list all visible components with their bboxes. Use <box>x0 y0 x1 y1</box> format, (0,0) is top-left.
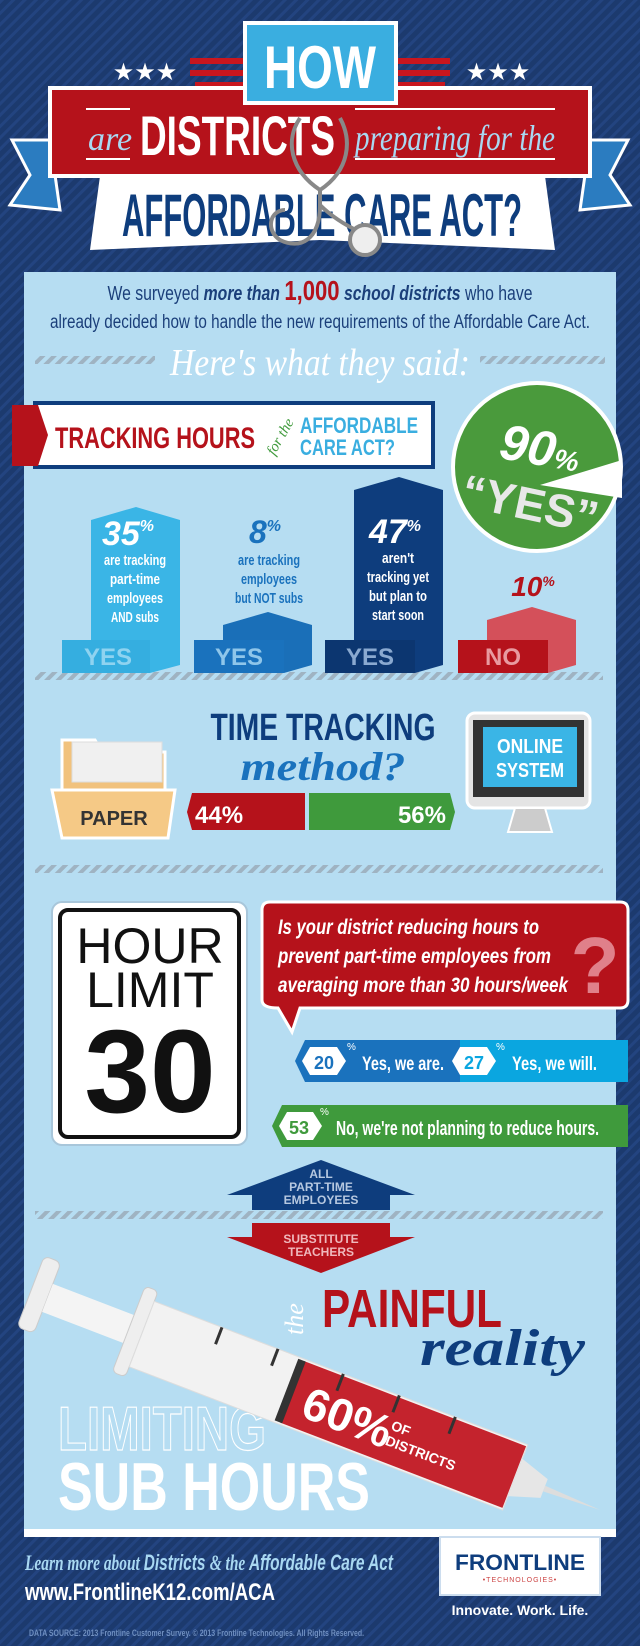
bar: 8% yes: employees <box>241 571 297 588</box>
text: limiting sub hours <box>58 1395 370 1525</box>
bar: 10% no: % <box>542 573 555 589</box>
bar: paper vs online <box>187 793 455 830</box>
footer: learn more: DATA SOURCE: 2013 Frontline Customer Survey. © 2013 Frontline Technologies. All Rights Reserved. <box>29 1628 364 1638</box>
bar: 35% yes: YES <box>84 644 132 671</box>
icon: online system monitor: ONLINE <box>497 736 563 758</box>
icon: paper folder <box>52 740 175 838</box>
bar: paper vs online: 44% <box>195 802 243 829</box>
bar: 8% yes: 8 <box>249 514 267 550</box>
icon: stars left: ★★★ <box>113 59 177 86</box>
bar chart <box>35 477 603 680</box>
bar: 35% yes: are tracking <box>104 552 166 569</box>
callout: reducing hours question <box>262 902 628 1032</box>
answers: yes we are / yes we will <box>295 1040 628 1082</box>
bar: 8% yes: YES <box>215 644 263 671</box>
icon: stethoscope <box>271 118 360 244</box>
heading: the painful reality: PAINFUL <box>322 1279 502 1339</box>
arrow: up all part-time employees: ALL <box>309 1167 333 1181</box>
icon: online system monitor <box>467 713 590 832</box>
icon: syringe 60% of districts: DISTRICTS <box>383 1432 458 1474</box>
arrow: down substitute teachers: SUBSTITUTE <box>283 1232 359 1246</box>
intro text <box>50 275 590 333</box>
icon: syringe 60% of districts: OF <box>389 1417 413 1439</box>
answers: yes we are / yes we will: 20 <box>314 1053 334 1073</box>
footer: learn more <box>24 1550 394 1638</box>
90% yes circle: 90% <box>496 413 585 483</box>
arrow: down substitute teachers <box>227 1223 415 1273</box>
light panel <box>24 272 616 1537</box>
answer: no: 53 <box>289 1118 309 1138</box>
subheading: here's what they said: Here's what they said: <box>169 342 470 384</box>
tracking hours banner: CARE ACT? <box>300 435 395 460</box>
icon: paper folder: PAPER <box>80 808 148 830</box>
answer: no: % <box>320 1107 329 1118</box>
callout: reducing hours question: Is your district reducing hours to <box>278 916 539 939</box>
bar: 8% yes: % <box>267 518 281 535</box>
tracking hours banner: for the <box>264 416 298 458</box>
tracking hours banner: TRACKING HOURS <box>55 422 255 455</box>
bar: 35% yes <box>62 507 180 673</box>
title: DISTRICTS <box>140 104 335 167</box>
tracking hours banner <box>12 403 433 467</box>
arrow: up all part-time employees: EMPLOYEES <box>284 1193 358 1207</box>
tracking hours banner: AFFORDABLE <box>300 413 418 438</box>
90% yes circle <box>453 383 622 551</box>
callout: reducing hours question: prevent part-time employees from <box>277 945 551 968</box>
title: are <box>88 121 132 158</box>
icon: stars right: ★★★ <box>466 59 530 86</box>
time tracking heading: TIME TRACKING <box>210 707 436 749</box>
logo: frontline: FRONTLINE <box>455 1550 585 1575</box>
logo: frontline: Innovate. Work. Life. <box>452 1602 588 1618</box>
answers: yes we are / yes we will: 27 <box>464 1053 484 1073</box>
arrow: down substitute teachers: TEACHERS <box>288 1245 354 1259</box>
text: limiting sub hours: SUB HOURS <box>58 1449 370 1525</box>
icon: online system monitor: SYSTEM <box>496 760 564 782</box>
heading: the painful reality <box>280 1279 586 1377</box>
callout: reducing hours question: averaging more than 30 hours/week <box>278 974 569 997</box>
hour limit sign: 30 <box>84 1006 216 1138</box>
bar: 8% yes: but NOT subs <box>235 590 303 607</box>
bar: 47% yes: start soon <box>372 607 424 624</box>
bar: 35% yes: AND subs <box>111 609 159 626</box>
heading: the painful reality: the <box>280 1303 309 1335</box>
bar: 47% yes <box>325 477 443 673</box>
title <box>10 23 630 255</box>
answers: yes we are / yes we will: % <box>496 1042 505 1053</box>
answers: yes we are / yes we will: Yes, we are. <box>362 1054 444 1075</box>
icon: syringe 60% of districts <box>14 1248 617 1553</box>
bar: 35% yes: part-time <box>110 571 160 588</box>
hour limit sign: HOUR <box>76 918 224 974</box>
logo: frontline <box>440 1537 600 1618</box>
hour limit sign <box>52 902 247 1145</box>
callout: reducing hours question: ? <box>571 921 619 1010</box>
bar: 47% yes: 47 <box>369 513 407 551</box>
arrow: up all part-time employees <box>227 1160 415 1210</box>
bar: 47% yes: but plan to <box>369 588 427 605</box>
intro text: We surveyed more than 1,000 school districts who have <box>108 275 532 306</box>
bar: 10% no: NO <box>485 644 521 671</box>
heading: the painful reality: reality <box>420 1320 586 1377</box>
time tracking heading: method? <box>240 744 406 789</box>
bar: 35% yes: % <box>140 518 154 535</box>
subheading: here's what they said <box>35 342 605 384</box>
logo: frontline: •TECHNOLOGIES• <box>483 1577 557 1584</box>
bar: 47% yes: aren't <box>382 550 414 567</box>
answers: yes we are / yes we will: % <box>347 1042 356 1053</box>
title: preparing for the <box>353 118 555 158</box>
bar: 10% no: 10 <box>511 571 542 602</box>
bar: 8% yes: are tracking <box>238 552 300 569</box>
hour limit sign: LIMIT <box>86 962 214 1018</box>
bar: 47% yes: YES <box>346 644 394 671</box>
bar: 35% yes: 35 <box>102 515 140 553</box>
footer: learn more: www.FrontlineK12.com/ACA <box>24 1579 275 1606</box>
bar: 35% yes: employees <box>107 590 163 607</box>
title: HOW <box>264 34 376 101</box>
bar: 8% yes <box>194 514 312 673</box>
answer: no <box>272 1105 628 1147</box>
bar: 10% no <box>458 571 576 673</box>
arrow: up all part-time employees: PART-TIME <box>289 1180 353 1194</box>
bar: 47% yes: % <box>407 518 421 535</box>
90% yes circle: “YES” <box>457 464 603 544</box>
answers: yes we are / yes we will: Yes, we will. <box>512 1054 597 1075</box>
bar: paper vs online: 56% <box>398 802 446 829</box>
footer: learn more: Learn more about Districts & the Affordable Care Act <box>24 1550 394 1575</box>
text: limiting sub hours: LIMITING <box>58 1395 266 1464</box>
time tracking heading <box>210 707 436 789</box>
bar: 47% yes: tracking yet <box>367 569 429 586</box>
icon: syringe 60% of districts: 60% <box>295 1377 400 1458</box>
